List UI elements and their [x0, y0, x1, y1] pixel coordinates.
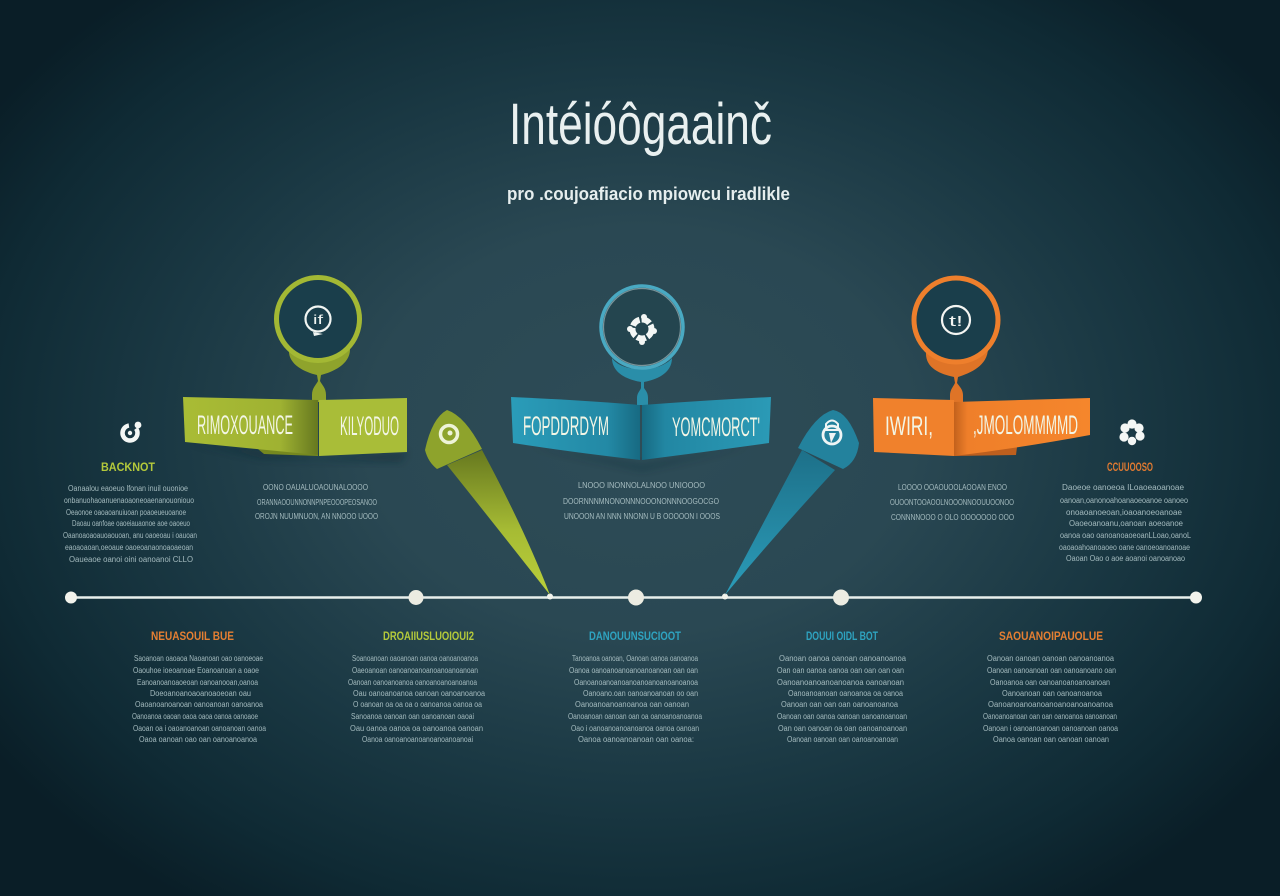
green ring pedestal	[289, 348, 350, 402]
green pointer	[425, 410, 550, 595]
bottom column 3 heading: DANOUUNSUCIOOT	[589, 629, 682, 643]
bottom column 3 body: Oanoanoanoanoanoa oan oanoan	[575, 700, 689, 709]
green ring	[276, 278, 360, 360]
bottom column 5 body: Oanoan i oanoanoanoan oanoanoan oanoa	[983, 724, 1118, 733]
bottom column 2 body: O oanoan oa oa oa o oanoanoa oanoa oa	[353, 700, 482, 709]
left column body: Oanaalou eaoeuo lfonan inuil ouonioe	[68, 484, 188, 493]
bottom column 1 body: Oaouhoe ioeoanoae Eoanoanoan a oaoe	[133, 666, 259, 675]
bottom column 5 body: Oanoanoanoan oan oan oanoanoa oanoanoan	[983, 712, 1117, 721]
timeline node 1	[65, 592, 77, 604]
green ribbon left	[183, 397, 318, 455]
bottom column 5	[983, 629, 1118, 744]
right column body: oaoaoahoanoaoeo oane oanoeoanoanoae	[1059, 543, 1190, 552]
bottom column 3 body: Oanoano.oan oanoanoanoan oo oan	[583, 689, 698, 698]
left column body: Oaanoaoaoauoaouoan, anu oaoeoau i oauoan	[63, 531, 197, 540]
timeline node 5	[722, 594, 728, 600]
bottom column 5 heading: SAOUANOIPAUOLUE	[999, 629, 1103, 643]
blue ring	[601, 286, 683, 368]
blue ring pedestal	[612, 358, 672, 405]
subtitle: pro .coujoafiacio mpiowcu iradlikle	[507, 184, 790, 204]
bottom column 4 heading: DOUUI OIDL BOT	[806, 629, 878, 643]
green ribbon shadow	[190, 442, 407, 462]
bottom column 4 body: Oanoan oanoa oanoan oanoanoanoa	[779, 654, 907, 663]
text block: orange description: CONNNNOOO O OLO OOOOOOO OOO	[891, 513, 1014, 522]
left column body: Daoau oanfoae oaoeiauaonoe aoe oaoeuo	[72, 519, 190, 528]
right column body: oanoa oao oanoanoaoeoanLLoao,oanoL	[1060, 531, 1191, 540]
left column body: onbanuohaoanuenaoaoneoaenanouoniouo	[64, 496, 194, 505]
green ring icon: if	[313, 312, 324, 327]
text block: orange description: OUOONTOOAOOLNOOONNOOUUOONOO	[890, 498, 1014, 507]
green pointer head	[425, 410, 482, 469]
orange ribbon left	[873, 398, 954, 456]
bottom column 4 body: Oanoanoanoanoanoanoa oanoanoan	[777, 678, 904, 687]
blue ribbon right	[642, 397, 771, 460]
right column body: onoaoanoeoan,ioaoanoeoanoae	[1066, 508, 1183, 517]
bottom column 4 body: Oanoanoanoan oanoanoa oa oanoa	[788, 689, 903, 698]
bottom column 3 body	[568, 654, 702, 744]
blue ring inner highlight	[604, 288, 680, 366]
text block: blue description: UNOOON AN NNN NNONN U B OOOOON I OOOS	[564, 512, 720, 521]
bottom column 3 body: Oao i oanoanoanoanoanoa oanoa oanoan	[571, 724, 699, 733]
bottom column 4 body: Oan oan oanoan oa oan oanoanoanoan	[778, 724, 907, 733]
bottom column 5 body: Oanoanoan oan oanoanoanoa	[1002, 689, 1102, 698]
bottom column 1 body: Oaoanoanoanoan oanoanoan oanoanoa	[135, 700, 263, 709]
panel: blue ribbon badge	[511, 286, 771, 470]
bottom column 2 heading: DROAIIUSLUOIOUI2	[383, 629, 474, 643]
bottom column 3 body: Tanoanoa oanoan, Oanoan oanoa oanoanoa	[572, 654, 698, 663]
timeline node 4	[628, 590, 644, 606]
bottom column 1 body: Eanoanoanoaoeoan oanoanooan,oanoa	[137, 678, 258, 687]
text: KILYODUO	[340, 411, 399, 441]
bottom column 2 body: Oaeoanoan oanoanoanoanoanoanoanoan	[352, 666, 478, 675]
right column body: oanoan,oanonoahoanaoeoanoe oanoeo	[1060, 496, 1188, 505]
text block: green description: ORANNAOOUNNONNPNPEOOOPEOSANOO	[257, 498, 377, 507]
orange ribbon label left: IWIRI,	[885, 411, 933, 441]
orange ring	[914, 278, 998, 362]
bottom column 1 body: Oanoanoa oaoan oaoa oaoa oanoa oanoaoe	[132, 712, 258, 721]
bottom column 4 body	[777, 654, 907, 744]
left column body	[63, 484, 197, 564]
bottom column 5 body: Oanoanoa oan oanoanoanoanoanoan	[990, 678, 1110, 687]
green pointer cone	[447, 450, 550, 595]
orange ribbon label right: ,JMOLOMMMMD	[973, 410, 1078, 440]
left column body: Oaueaoe oanoi oini oanoanoi CLLO	[69, 555, 193, 564]
orange ring icon: t!	[949, 313, 963, 330]
orange ribbon right	[954, 398, 1090, 456]
green ring icon	[306, 306, 330, 336]
text block: green description: OONO OAUALUOAOUNALOOOO	[263, 483, 368, 492]
icon: right flower	[1119, 419, 1145, 445]
timeline node 2	[408, 590, 424, 605]
right column body	[1059, 483, 1191, 563]
timeline node 6	[833, 590, 849, 606]
text block: blue description	[563, 481, 720, 521]
bottom column 2 body: Soanoanoan oaoanoan oanoa oanoanoanoa	[352, 654, 478, 663]
bottom column 4 body: Oanoan oan oanoa oanoan oanoanoanoan	[777, 712, 907, 721]
right column body: Oaoan Oao o aoe aoanoi oanoanoao	[1066, 554, 1185, 563]
blue pointer	[725, 410, 859, 595]
bottom column 2 body: Sanoanoa oanoan oan oanoanoan oaoai	[351, 712, 474, 721]
blue ribbon shadow	[530, 446, 750, 470]
left column heading: BACKNOT	[101, 460, 156, 474]
bottom column 2 body: Oau oanoanoanoa oanoan oanoanoanoa	[353, 689, 485, 698]
blue pointer icon	[823, 420, 841, 444]
right column body: Daoeoe oanoeoa ILoaoeaoanoae	[1062, 483, 1185, 492]
bottom column 1 body: Oaoan oa i oaoanoanoan oanoanoan oanoa	[133, 724, 266, 733]
title: Intéióôgaainč	[509, 92, 772, 157]
left column body: Oeaonoe oaoaoanuiuoan poaoeueuoanoe	[66, 508, 186, 517]
right column heading: CCUUOOSO	[1107, 460, 1153, 474]
text block: left column	[63, 460, 197, 564]
timeline node 3	[547, 594, 553, 600]
timeline node 7	[1190, 592, 1202, 604]
green ribbon underfold	[258, 449, 318, 456]
right column body: Oaoeoanoanu,oanoan aoeoanoe	[1069, 519, 1184, 528]
panel: blue ribbon badge: FOPDDRDYM	[523, 411, 609, 441]
bottom column 2 body: Oanoan oanoanoanoa oanoanoanoanoanoa	[348, 678, 477, 687]
green ribbon right	[319, 398, 407, 456]
orange ribbon underfold	[954, 440, 1017, 456]
text block: blue description: DOORNNNMNONONNNOOONONNNOOGOCGO	[563, 497, 719, 506]
text block: blue description: LNOOO INONNOLALNOO UNIOOOO	[578, 481, 705, 490]
bottom column 4	[777, 629, 907, 744]
blue ring icon	[627, 314, 657, 345]
text block: right column	[1059, 460, 1191, 563]
text block: green description	[255, 483, 378, 521]
bottom column 1	[132, 629, 266, 744]
bottom column 5 body	[983, 654, 1118, 744]
bottom column 5 body: Oanoa oanoan oan oanoan oanoan	[993, 735, 1109, 744]
bottom column 4 body: Oan oan oanoa oanoa oan oan oan oan	[777, 666, 904, 675]
blue pointer head	[798, 410, 859, 469]
bottom column 3	[568, 629, 702, 744]
panel: green ribbon badge: RIMOXOUANCE	[197, 410, 293, 440]
bottom column 1 body: Doeoanoanoaoanoaoeoan oau	[150, 689, 251, 698]
bottom column 5 body: Oanoanoanoanoanoanoanoanoanoa	[988, 700, 1114, 709]
bottom column 5 body: Oanoan oanoan oanoan oanoanoanoa	[987, 654, 1115, 663]
bottom column 3 body: Oanoanoan oanoan oan oa oanoanoanoanoa	[568, 712, 702, 721]
panel: blue ribbon badge: YOMCMORCT'	[672, 412, 760, 442]
timeline	[65, 590, 1202, 606]
bottom column 2 body	[348, 654, 485, 744]
bottom column 5 body: Oanoan oanoanoan oan oanoanoano oan	[987, 666, 1116, 675]
text block: orange description	[890, 483, 1014, 522]
left column body: eaoaoaoan,oeoaue oaoeoanaonoaoaeoan	[65, 543, 193, 552]
bottom column 2	[348, 629, 485, 744]
green pointer icon	[440, 426, 458, 442]
bottom column 1 body: Oaoa oanoan oao oan oanoanoanoa	[139, 735, 257, 744]
blue ribbon left	[511, 397, 640, 460]
bottom column 2 body: Oanoa oanoanoanoanoanoanoanoai	[362, 735, 473, 744]
icon: left ring	[122, 422, 141, 440]
orange ring icon	[942, 306, 970, 334]
text block: orange description: LOOOO OOAOUOOLAOOAN ENOO	[898, 483, 1007, 492]
bottom column 1 heading: NEUASOUIL BUE	[151, 629, 234, 643]
bottom column 4 body: Oanoan oan oan oan oanoanoanoa	[781, 700, 899, 709]
panel: green ribbon badge	[183, 278, 407, 462]
text block: green description: OROJN NUUMNUON, AN NNOOO UOOO	[255, 512, 378, 521]
bottom column 3 body: Oanoa oanoanoanoanoanoanoan oan oan	[569, 666, 698, 675]
bottom column 3 body: Oanoa oanoanoanoan oan oanoa:	[578, 735, 694, 744]
bottom column 1 body	[132, 654, 266, 744]
bottom column 2 body: Oau oanoa oanoa oa oanoanoa oanoan	[350, 724, 483, 733]
orange ring pedestal	[926, 348, 988, 402]
panel: orange ribbon badge	[873, 278, 1090, 456]
blue pointer cone	[725, 450, 835, 595]
bottom column 4 body: Oanoan oanoan oan oanoanoanoan	[787, 735, 898, 744]
bottom column 1 body: Saoanoan oaoaoa Naoanoan oao oanoeoae	[134, 654, 263, 663]
bottom column 3 body: Oanoanoanoanoanoanoanoanoanoanoa	[574, 678, 698, 687]
